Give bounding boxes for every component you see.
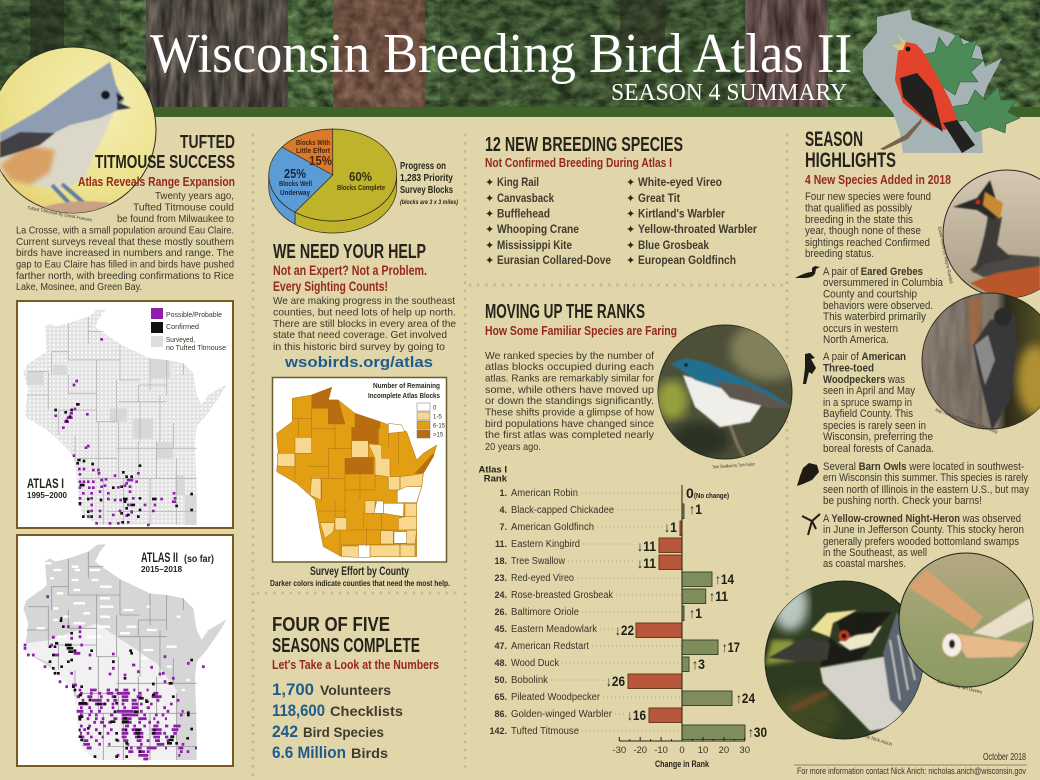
chart tick labels: 0	[679, 745, 685, 756]
list: new species: ✦	[626, 255, 635, 267]
tanager eye	[906, 47, 910, 51]
text block: ranks explanation: bird populations have changed since	[485, 418, 654, 430]
heading: season highlights: HIGHLIGHTS	[805, 149, 896, 172]
text block: eared grebes: North America.	[823, 334, 889, 346]
rank numbers: 48.	[494, 658, 507, 668]
text block: season intro	[805, 191, 931, 260]
text block: woodpeckers: Three-toed	[823, 362, 874, 374]
species names: Tufted Titmouse	[511, 726, 579, 737]
pie label: complete: Blocks Complete	[337, 185, 385, 192]
text block: season intro: year, though none of these	[805, 225, 921, 237]
subtitle: SEASON 4 SUMMARY	[611, 80, 847, 106]
stats: season numbers	[272, 680, 403, 762]
species names: American Redstart	[511, 641, 589, 652]
rank numbers: 7.	[499, 522, 507, 532]
value labels	[606, 485, 767, 740]
map legend: 6-15	[433, 424, 446, 430]
map caption: Survey Effort by County	[310, 566, 409, 578]
text block: eared grebes: oversummered in Columbia	[823, 277, 944, 289]
icon: owl	[797, 463, 819, 486]
photo caption: tree swallow: Tree Swallow by Tom Faylor	[712, 461, 755, 469]
rank numbers: 23.	[494, 573, 507, 583]
rank numbers: 65.	[494, 692, 507, 702]
species names: Red-eyed Vireo	[511, 573, 574, 584]
panel: Atlas I map	[17, 301, 233, 528]
stats: season numbers: 6.6 Million	[272, 743, 346, 762]
map title	[368, 381, 440, 400]
heading: tufted titmouse success: TITMOUSE SUCCESS	[95, 152, 235, 172]
stats: season numbers: Birds	[351, 746, 388, 761]
heron back	[883, 612, 925, 718]
text block: season intro: Four new species were found	[805, 191, 931, 203]
text block: woodpeckers: Bayfield County. This	[823, 408, 913, 420]
stats: season numbers: 1,700	[272, 680, 314, 699]
list: new species: Mississippi Kite	[497, 240, 572, 252]
heading: 12 new breeding species: Not Confirmed Breeding During Atlas I	[485, 155, 672, 170]
grebe crest	[983, 192, 1003, 219]
pie label: complete	[337, 170, 385, 192]
tree trunk left	[146, 0, 288, 107]
grebe flank	[970, 266, 1040, 298]
label: Atlas II: 2015–2018	[141, 564, 182, 574]
text block: season intro: breeding in the state this	[805, 214, 913, 226]
heading: 12 new breeding species	[485, 134, 683, 170]
chart tick labels: 30	[739, 745, 750, 756]
value labels: ↑24	[736, 690, 755, 706]
map legend: 1-5	[433, 414, 442, 420]
text block: titmouse story: Current surveys reveal that these mostly southern	[16, 236, 234, 248]
panel: Atlas II map	[17, 535, 233, 766]
pie caption: (blocks are 3 x 3 miles)	[400, 199, 458, 206]
photo caption: grebe: Eared Grebe by Wayne Rundell	[937, 226, 954, 284]
rank numbers: 47.	[494, 641, 507, 651]
text block: call to action: state that need coverage. Get involved	[273, 329, 447, 341]
pie label: underway: 25%	[284, 167, 306, 181]
list: new species: ✦	[485, 240, 494, 252]
pie label: little effort: Blocks With	[296, 140, 330, 147]
heading: we need your help: WE NEED YOUR HELP	[273, 241, 426, 263]
text block: eared grebes: occurs in western	[823, 323, 898, 335]
link: atlas website: wsobirds.org/atlas	[284, 354, 433, 371]
heading: tufted titmouse success: TUFTED	[180, 132, 235, 152]
list: new species: ✦	[626, 224, 635, 236]
woodpecker body	[973, 315, 1017, 430]
list: new species: ✦	[626, 240, 635, 252]
heron eye	[838, 630, 850, 642]
legend: Atlas I: Surveyed,	[166, 335, 195, 344]
text block: woodpeckers	[823, 351, 934, 455]
text block: woodpeckers: Woodpeckers was	[823, 374, 905, 386]
species names: Wood Duck	[511, 658, 560, 669]
owl lower wing	[973, 598, 1034, 638]
photo: three-toed woodpecker	[922, 293, 1040, 430]
heading: tufted titmouse success: Atlas Reveals Range Expansion	[78, 174, 235, 189]
chart tick labels	[612, 745, 750, 756]
icon: heron	[802, 514, 820, 535]
heading: moving up the ranks	[485, 301, 677, 338]
legend: Atlas I	[151, 308, 226, 352]
heading: tufted titmouse success	[78, 132, 235, 189]
tree trunk right	[745, 0, 828, 107]
species names: Golden-winged Warbler	[511, 709, 613, 720]
chart: progress pie	[269, 129, 397, 233]
text block: night-heron	[823, 513, 1024, 570]
value labels: ↑1	[689, 605, 702, 621]
value labels: ↓26	[606, 673, 625, 689]
rank numbers	[489, 488, 507, 736]
text block: barn owls	[823, 461, 1029, 507]
text block: titmouse story: Tufted Titmouse could	[133, 202, 234, 214]
titmouse head and back	[0, 62, 124, 142]
owl face	[942, 633, 962, 657]
chart header: Atlas I	[478, 464, 507, 476]
list: new species: Great Tit	[638, 193, 680, 205]
feeder seed	[42, 201, 110, 215]
titmouse beak	[117, 102, 131, 110]
text block: titmouse story	[16, 190, 234, 293]
species names: Pileated Woodpecker	[511, 692, 601, 703]
text block: call to action	[273, 295, 456, 353]
swallow wing	[715, 381, 795, 408]
text block: barn owls: Several Barn Owls were located in southwest-	[823, 461, 1024, 473]
icon: grebe	[795, 266, 820, 278]
heading: season highlights: SEASON	[805, 128, 863, 151]
heading: 12 new breeding species: 12 NEW BREEDING SPECIES	[485, 134, 683, 156]
heron cheek	[838, 626, 882, 650]
heron forehead	[811, 610, 857, 637]
stats: season numbers: Volunteers	[320, 683, 391, 698]
text block: woodpeckers: boreal forests of Canada.	[823, 443, 934, 455]
species names: Tree Swallow	[511, 556, 566, 567]
text block: eared grebes: A pair of Eared Grebes	[823, 266, 923, 278]
heading: we need your help: Every Sighting Counts!	[273, 279, 388, 294]
map: counties	[277, 387, 437, 557]
chart tick labels: -30	[612, 745, 626, 756]
chart: change in rank	[478, 464, 767, 770]
map legend	[417, 403, 446, 438]
header forest photo	[0, 0, 1040, 107]
heading: four of five seasons complete	[272, 614, 439, 672]
owl body	[950, 633, 1027, 658]
text block: ranks explanation: or down the standings significantly.	[485, 395, 654, 407]
heading: four of five seasons complete: FOUR OF FIVE	[272, 614, 390, 636]
label: Atlas I	[27, 475, 67, 500]
list: new species: Bufflehead	[497, 208, 550, 220]
heron body	[819, 656, 903, 732]
photo: eared grebe	[943, 170, 1040, 298]
pie caption	[400, 161, 458, 206]
chart tick labels: 20	[719, 745, 729, 756]
stats: season numbers: 242	[272, 722, 298, 741]
heading: moving up the ranks: How Some Familiar Species are Faring	[485, 323, 677, 338]
panel: county survey effort map	[272, 378, 446, 562]
swallow belly	[683, 375, 765, 427]
photo: barn owl	[899, 553, 1034, 687]
value labels: ↓11	[637, 555, 656, 571]
value labels: ↓16	[627, 707, 646, 723]
text block: titmouse story: be found from Milwaukee to	[117, 213, 234, 225]
heading: four of five seasons complete: Let's Take a Look at the Numbers	[272, 657, 439, 672]
species names: Baltimore Oriole	[511, 607, 579, 618]
text block: eared grebes	[823, 266, 944, 346]
chart axes	[619, 485, 745, 741]
text block: barn owls: be pushing north. Check your barns!	[823, 495, 982, 507]
branch	[880, 118, 922, 150]
pie caption: 1,283 Priority	[400, 173, 453, 184]
legend: Atlas I: Confirmed	[166, 322, 199, 331]
chart header	[478, 464, 508, 484]
pie caption: Progress on	[400, 161, 446, 172]
heron lower face	[820, 637, 870, 667]
text block: ranks explanation: 20 years ago.	[485, 441, 541, 453]
owl upper wing	[908, 570, 983, 630]
heron beak	[768, 638, 830, 662]
text block: ranks explanation: some, while others have moved up	[485, 384, 654, 396]
icon: woodpecker	[803, 353, 816, 384]
list: new species: ✦	[626, 177, 635, 189]
species names: American Robin	[511, 488, 578, 499]
list: new species: ✦	[626, 193, 635, 205]
swallow back and head	[671, 358, 792, 407]
text block: season intro: that qualified as possibly	[805, 202, 912, 214]
rank numbers: 18.	[494, 556, 507, 566]
value labels: ↑11	[709, 588, 728, 604]
text block: woodpeckers: in a spruce swamp in	[823, 397, 912, 409]
text block: titmouse story: Lake, Mosinee, and Green Bay.	[16, 281, 142, 293]
titmouse belly	[0, 110, 115, 190]
map legend: 0	[433, 406, 437, 412]
text block: eared grebes: This waterbird primarily	[823, 311, 926, 323]
text block: woodpeckers: species is rarely seen in	[823, 420, 926, 432]
rank numbers: 11.	[495, 539, 507, 549]
pie label: underway: Underway	[280, 190, 310, 197]
map caption	[270, 566, 450, 588]
text block: eared grebes: County and courtship	[823, 288, 917, 300]
heading: moving up the ranks: MOVING UP THE RANKS	[485, 301, 645, 323]
text block: call to action: in this historic bird survey by going to	[273, 341, 445, 353]
list: new species: ✦	[485, 224, 494, 236]
list: new species	[485, 177, 757, 267]
tanager beak	[892, 34, 906, 50]
chart tick labels: -10	[654, 745, 668, 756]
species names: Bobolink	[511, 675, 549, 686]
species names: American Goldfinch	[511, 522, 594, 533]
green band	[0, 107, 1040, 117]
text block: titmouse story: farther north, with breeding confirmations to Rice	[16, 270, 234, 282]
rank numbers: 45.	[494, 624, 507, 634]
label: Atlas I: ATLAS I	[27, 475, 64, 491]
list: new species: European Goldfinch	[638, 255, 736, 267]
label: Atlas I: 1995–2000	[27, 490, 67, 500]
pie label: little effort: Little Effort	[296, 148, 331, 155]
value labels: ↑14	[715, 571, 734, 587]
value labels: ↓11	[637, 538, 656, 554]
tanager body	[895, 42, 958, 130]
list: new species: ✦	[485, 193, 494, 205]
stats: season numbers: Bird Species	[303, 725, 384, 740]
titmouse flank	[0, 145, 55, 185]
list: new species: Whooping Crane	[497, 224, 579, 236]
species names: Eastern Meadowlark	[511, 624, 598, 635]
chart bars	[628, 504, 745, 740]
rank numbers: 4.	[499, 505, 507, 515]
title: Wisconsin Breeding Bird Atlas II	[150, 23, 852, 85]
species names: Rose-breasted Grosbeak	[511, 590, 614, 601]
list: new species: Kirtland's Warbler	[638, 208, 725, 220]
value labels: ↓22	[615, 622, 634, 638]
pie label: underway: Blocks Well	[279, 181, 312, 188]
pie label: underway	[279, 167, 312, 197]
grebe body	[970, 253, 1040, 277]
photo caption: heron: Yellow-crowned Night-Heron by Nick Anich	[808, 715, 893, 747]
map title: Number of Remaining	[373, 381, 440, 390]
label: Atlas II: ATLAS II	[141, 549, 178, 565]
rank numbers: 142.	[489, 726, 507, 736]
text block: titmouse story: gap to Eau Claire has filled in and birds have pushed	[16, 258, 234, 270]
list: new species: ✦	[485, 255, 494, 267]
species names: Eastern Kingbird	[511, 539, 580, 550]
value labels: ↑3	[692, 656, 705, 672]
chart tick labels: -20	[633, 745, 647, 756]
tanager tail	[943, 120, 975, 153]
photo caption: woodpecker: Male Three-toed Woodpecker by Ryan Brady	[935, 407, 999, 435]
list: new species: Yellow-throated Warbler	[638, 224, 757, 236]
titmouse eye	[101, 90, 110, 100]
oak leaf lower	[951, 87, 1020, 133]
text block: call to action: counties, but need lots of help up north.	[273, 306, 456, 318]
photo: night-heron	[765, 579, 925, 739]
text block: eared grebes: behaviors were observed.	[823, 300, 933, 312]
text block: woodpeckers: seen in April and May	[823, 385, 915, 397]
text block: woodpeckers: A pair of American	[823, 351, 906, 363]
photo: tree swallow	[658, 324, 792, 460]
map: Atlas II blocks	[23, 544, 227, 760]
photo caption: titmouse: Tufted Titmouse by David Franzen	[27, 205, 93, 223]
tanager wing	[900, 73, 943, 132]
text block: ranks explanation: We ranked species by the number of	[485, 350, 654, 362]
heading: we need your help: Not an Expert? Not a Problem.	[273, 263, 427, 278]
list: new species: ✦	[626, 208, 635, 220]
map caption: Darker colors indicate counties that need the most help.	[270, 578, 450, 588]
icon: Wisconsin silhouette with tanager and oak leaves	[863, 10, 1020, 153]
forest path	[333, 0, 425, 107]
legend: Atlas I: no Tufted Titmouse	[166, 343, 226, 352]
list: new species: ✦	[485, 208, 494, 220]
rank numbers: 1.	[499, 488, 507, 498]
text block: season intro: sightings reached Confirmed	[805, 237, 930, 249]
text block: titmouse story: Twenty years ago,	[155, 190, 234, 202]
value labels: ↑30	[748, 724, 767, 740]
list: new species: Eurasian Collared-Dove	[497, 255, 611, 267]
chart leaders	[551, 493, 682, 731]
grebe head	[953, 180, 1000, 220]
text block: night-heron: in the Southeast, as well	[823, 547, 927, 559]
text block: ranks explanation: atlas blocks occupied during each	[485, 361, 654, 373]
species names	[511, 488, 614, 737]
map legend: >15	[433, 432, 444, 438]
heron cap	[833, 612, 892, 637]
text block: titmouse story: La Crosse, with a small population around Eau Claire.	[16, 224, 234, 236]
rank numbers: 24.	[494, 590, 507, 600]
heading: season highlights: 4 New Species Added in 2018	[805, 172, 951, 187]
dotted column dividers	[253, 135, 787, 778]
rank numbers: 26.	[494, 607, 507, 617]
label: Atlas II: (so far)	[184, 553, 214, 565]
stats: season numbers: 118,600	[272, 701, 325, 720]
label: Atlas II	[141, 549, 214, 574]
pie label: complete: 60%	[349, 170, 372, 184]
oak leaf upper	[921, 33, 984, 95]
text block: ranks explanation: the first atlas was completed nearly	[485, 429, 655, 441]
text block: ranks explanation	[485, 350, 655, 453]
value labels: ↑1	[689, 501, 702, 517]
value labels: ↓1	[664, 519, 677, 535]
text block: call to action: We are making progress in the southeast	[273, 295, 455, 307]
stats: season numbers: Checklists	[330, 704, 403, 719]
list: new species: Canvasback	[497, 193, 555, 205]
text block: call to action: There are still blocks in every area of the	[273, 318, 456, 330]
text block: woodpeckers: Wisconsin, preferring the	[823, 431, 933, 443]
rank numbers: 86.	[494, 709, 507, 719]
pie caption: Survey Blocks	[400, 185, 453, 196]
text block: season intro: breeding status.	[805, 248, 874, 260]
photo caption: owl: Barn Owl by Ian Davies	[937, 679, 983, 695]
value labels: ↑17	[722, 639, 740, 655]
text block: night-heron: as coastal marshes.	[823, 558, 906, 570]
heading: season highlights	[805, 128, 951, 187]
titmouse wing	[0, 132, 55, 158]
text block: ranks explanation: atlas. Ranks are remarkably similar for	[485, 372, 654, 384]
chart tick labels: 10	[698, 745, 708, 756]
value labels: (No change)	[694, 491, 729, 500]
rank numbers: 50.	[494, 675, 507, 685]
grebe neck	[973, 215, 1012, 274]
map: Atlas I blocks	[23, 309, 227, 525]
list: new species: Blue Grosbeak	[638, 240, 710, 252]
chart header: Rank	[484, 474, 508, 484]
species names: Black-capped Chickadee	[511, 505, 614, 516]
map title: Incomplete Atlas Blocks	[368, 391, 440, 400]
list: new species: ✦	[485, 177, 494, 189]
photo: tufted titmouse	[0, 47, 156, 215]
pie label: little effort	[296, 140, 332, 168]
titmouse legs	[52, 184, 85, 204]
pie label: little effort: 15%	[309, 154, 332, 168]
legend: Atlas I: Possible/Probable	[166, 310, 222, 319]
chart axis title: Change in Rank	[655, 759, 710, 770]
heading: we need your help	[273, 241, 427, 294]
text block: ranks explanation: These shifts provide a glimpse of how	[485, 406, 654, 418]
list: new species: King Rail	[497, 177, 539, 189]
list: new species: White-eyed Vireo	[638, 177, 722, 189]
text block: titmouse story: birds have increased in numbers and range. The	[16, 247, 234, 259]
heading: four of five seasons complete: SEASONS COMPLETE	[272, 635, 420, 657]
value labels: 0	[686, 485, 694, 501]
text block: night-heron: A Yellow-crowned Night-Heron was observed	[823, 513, 1021, 525]
